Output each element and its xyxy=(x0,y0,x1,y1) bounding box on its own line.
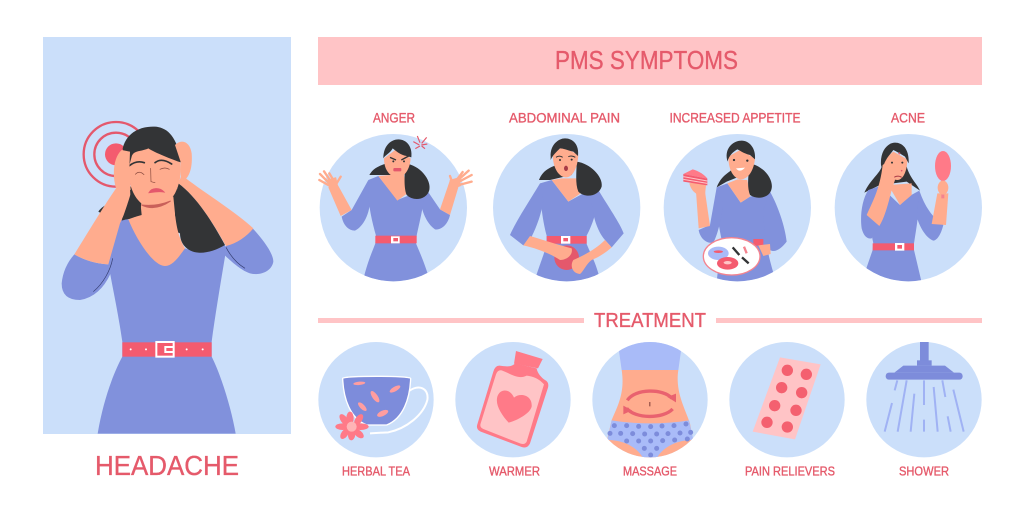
plate of sweets xyxy=(703,238,760,275)
belt xyxy=(873,243,914,251)
petals xyxy=(353,381,401,418)
right arm xyxy=(178,175,253,246)
label: acne: ACNE xyxy=(891,110,925,126)
label: pain relievers: PAIN RELIEVERS xyxy=(745,464,835,478)
raised arm xyxy=(696,192,710,228)
flower xyxy=(335,412,369,441)
panel: headache xyxy=(43,37,291,434)
divider right xyxy=(716,318,982,323)
features xyxy=(891,152,903,177)
hand on mirror xyxy=(938,181,948,195)
mouth xyxy=(149,189,164,193)
chest xyxy=(888,183,912,205)
treatment: herbal tea xyxy=(318,342,434,457)
left hair lock xyxy=(122,190,142,221)
icon: pain target rings xyxy=(84,122,148,187)
left sleeve xyxy=(62,254,113,300)
face xyxy=(728,150,755,179)
top hair xyxy=(123,127,182,173)
right hair lock over chest xyxy=(175,183,225,253)
cake xyxy=(683,169,707,185)
title: PMS SYMPTOMS xyxy=(555,45,738,75)
left arm xyxy=(74,188,131,264)
navel xyxy=(649,402,650,406)
face xyxy=(883,152,907,180)
symptom: abdominal pain xyxy=(493,134,640,287)
blister pack xyxy=(753,357,821,439)
symptom: acne xyxy=(835,134,982,287)
top hair xyxy=(383,139,412,158)
sleeves xyxy=(510,183,624,247)
sleeves xyxy=(699,187,787,251)
chest xyxy=(378,175,407,201)
dress xyxy=(716,183,773,282)
arms and hands xyxy=(523,236,612,274)
underwear xyxy=(607,420,693,458)
hand mirror xyxy=(935,151,951,198)
dress xyxy=(536,180,598,282)
heading: headache: HEADACHE xyxy=(95,450,239,481)
chest xyxy=(727,179,750,203)
treatment: warmer xyxy=(455,342,571,457)
features xyxy=(390,156,409,171)
bottle inner xyxy=(480,370,544,444)
neck and chest xyxy=(128,197,185,266)
belt xyxy=(547,236,587,244)
right hair lock xyxy=(405,163,430,199)
back hair xyxy=(98,182,180,233)
raised arm xyxy=(932,193,948,225)
cup xyxy=(343,376,411,425)
section heading: treatment: TREATMENT xyxy=(594,310,706,332)
heart xyxy=(497,391,532,423)
top garment xyxy=(618,342,682,370)
treatment: shower xyxy=(866,342,982,457)
infographic xyxy=(43,37,982,476)
label: massage: MASSAGE xyxy=(623,464,677,478)
pills xyxy=(761,365,812,433)
illustration: woman with headache xyxy=(62,122,273,434)
label: increased appetite: INCREASED APPETITE xyxy=(670,110,800,126)
hand xyxy=(689,183,706,195)
sleeves xyxy=(861,190,943,241)
features xyxy=(733,159,748,171)
face xyxy=(553,147,578,177)
hair back xyxy=(369,162,407,175)
anger mark xyxy=(413,136,427,149)
shower head xyxy=(886,342,963,380)
belt xyxy=(753,239,763,246)
dress body xyxy=(98,219,236,434)
features xyxy=(556,156,575,171)
chest xyxy=(552,178,581,202)
top hair xyxy=(551,138,578,160)
facial features xyxy=(129,160,172,183)
right hair lock xyxy=(748,163,772,198)
bottle neck xyxy=(514,351,543,368)
label: abdominal pain: ABDOMINAL PAIN xyxy=(509,110,620,126)
label: shower: SHOWER xyxy=(899,464,949,478)
arm and hand on cheek xyxy=(867,160,895,226)
hands xyxy=(319,171,472,190)
belt xyxy=(122,342,212,357)
symptom: anger xyxy=(319,134,472,287)
torso xyxy=(607,370,693,458)
top hair xyxy=(727,141,755,162)
header bar xyxy=(318,37,982,85)
dress xyxy=(364,176,428,282)
dress xyxy=(866,186,921,282)
label: warmer: WARMER xyxy=(489,464,540,478)
forearms xyxy=(328,180,458,216)
label: anger: ANGER xyxy=(373,110,415,126)
face xyxy=(384,148,411,177)
treatment: massage xyxy=(592,342,708,458)
hair back xyxy=(717,163,750,187)
hair back xyxy=(539,162,577,180)
label: herbal tea: HERBAL TEA xyxy=(342,464,411,478)
sleeves xyxy=(342,180,450,231)
water streams xyxy=(885,380,964,432)
divider left xyxy=(318,318,584,323)
treatment: pain relievers xyxy=(729,342,845,457)
hip hand xyxy=(758,244,771,256)
heart pattern xyxy=(607,421,693,457)
face xyxy=(128,143,181,208)
bottle xyxy=(477,363,548,448)
left hand xyxy=(114,150,131,190)
massage arrows xyxy=(623,391,676,416)
symptom: increased appetite xyxy=(664,134,811,287)
hair back xyxy=(864,167,920,193)
pain spot xyxy=(554,245,579,270)
cup handle xyxy=(370,388,428,433)
right sleeve xyxy=(224,228,273,274)
belt xyxy=(375,236,417,243)
right hair lock xyxy=(576,162,602,196)
right hand xyxy=(175,142,192,182)
top hair xyxy=(881,143,909,170)
